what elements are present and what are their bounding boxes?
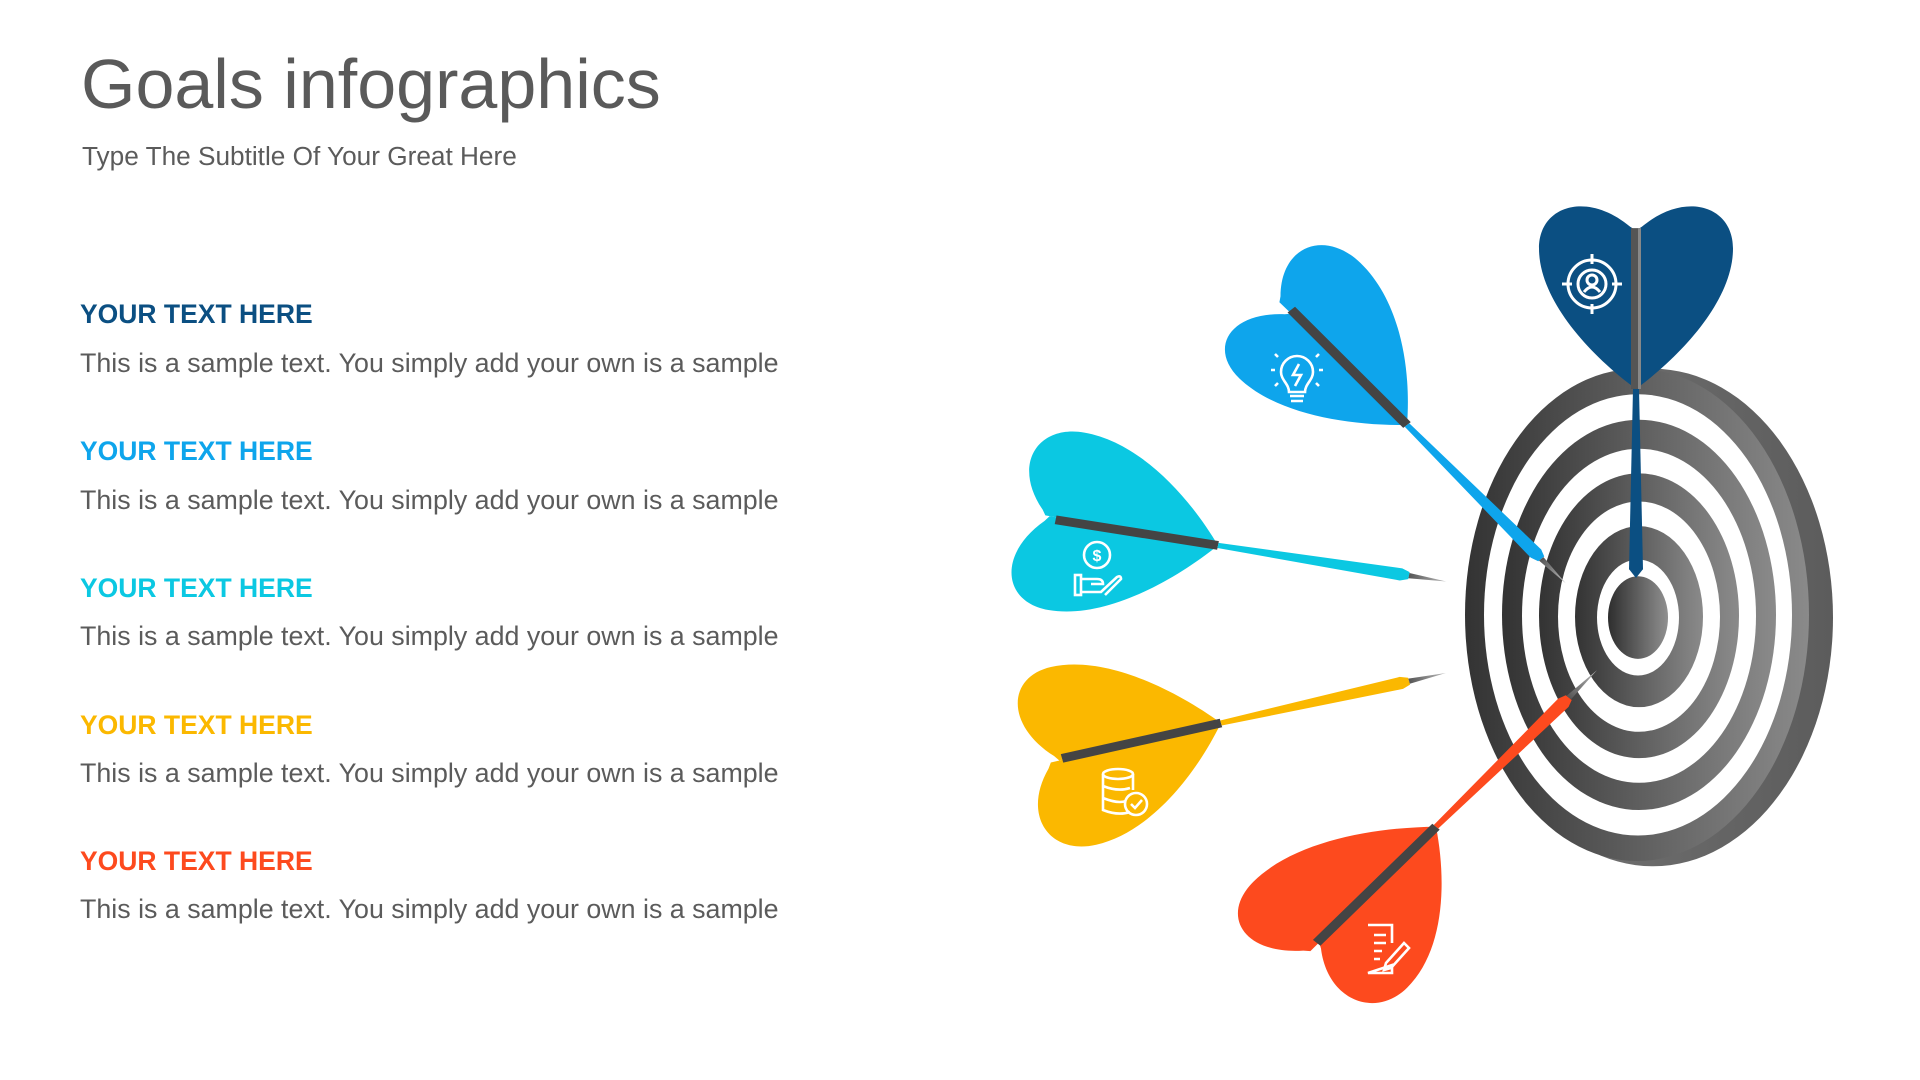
heading 2: YOUR TEXT HERE [80, 436, 313, 466]
icon: hand with coin [1075, 542, 1121, 595]
body 4: This is a sample text. You simply add your own is a sample [80, 758, 779, 788]
body 5: This is a sample text. You simply add your own is a sample [80, 894, 779, 924]
dart: light blue [1195, 230, 1571, 587]
body 2: This is a sample text. You simply add your own is a sample [80, 485, 779, 515]
text block 5 [80, 846, 779, 924]
icon: target person [1562, 254, 1622, 314]
dart: yellow [998, 634, 1448, 855]
dart: cyan [999, 425, 1448, 636]
text block 2 [80, 436, 779, 515]
heading 1: YOUR TEXT HERE [80, 299, 313, 329]
icon: lightbulb [1271, 354, 1323, 401]
body 3: This is a sample text. You simply add your own is a sample [80, 621, 779, 651]
icon: document with pencil [1368, 925, 1409, 973]
text block 4 [80, 710, 779, 788]
title: Goals infographics [81, 45, 661, 123]
dart: red [1220, 666, 1602, 1028]
dart: dark blue [1539, 206, 1733, 578]
text block 3 [80, 573, 779, 651]
icon: database check [1103, 769, 1147, 815]
subtitle: Type The Subtitle Of Your Great Here [82, 141, 517, 171]
heading 3: YOUR TEXT HERE [80, 573, 313, 603]
text block 1 [80, 299, 779, 378]
heading 4: YOUR TEXT HERE [80, 710, 313, 740]
board and darts [998, 206, 1833, 1028]
heading 5: YOUR TEXT HERE [80, 846, 313, 876]
icon: hand with coin: $ [1093, 548, 1102, 565]
board [1465, 369, 1833, 866]
body 1: This is a sample text. You simply add your own is a sample [80, 348, 779, 378]
